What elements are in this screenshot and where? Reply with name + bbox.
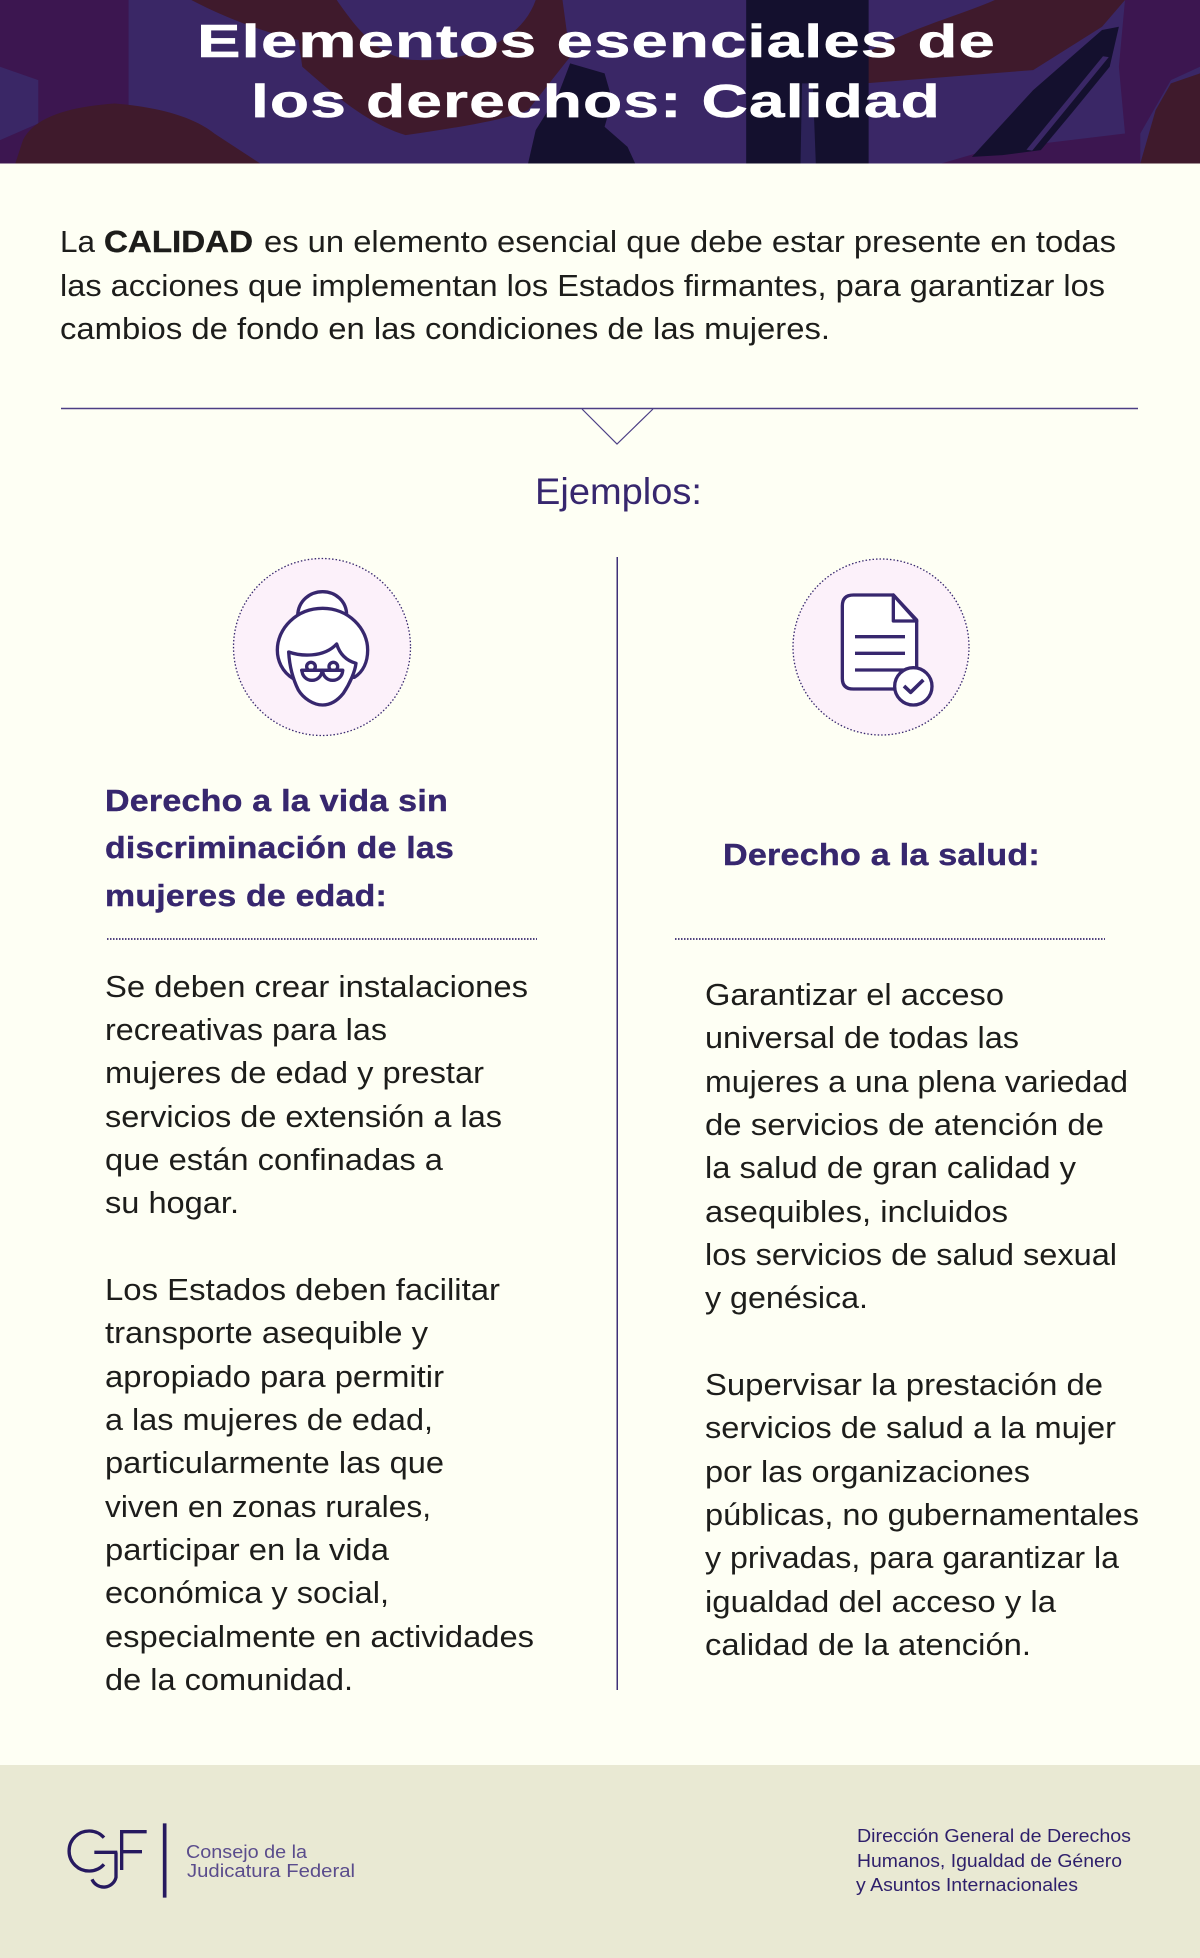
heading: ejemplos: Ejemplos: bbox=[535, 471, 702, 512]
left text: paragraph 2: a las mujeres de edad, bbox=[105, 1402, 433, 1437]
title bbox=[197, 15, 996, 127]
intro text: es un elemento esencial que debe estar presente en todas bbox=[264, 224, 1116, 259]
left text: paragraph 2: de la comunidad. bbox=[105, 1662, 353, 1697]
intro text: cambios de fondo en las condiciones de las mujeres. bbox=[60, 311, 830, 346]
left heading: mujeres de edad: bbox=[105, 878, 387, 913]
left text: paragraph 2: Los Estados deben facilitar bbox=[105, 1272, 500, 1307]
left text: paragraph 2: particularmente las que bbox=[105, 1445, 444, 1480]
right heading: Derecho a la salud: bbox=[723, 837, 1040, 872]
left heading bbox=[105, 783, 454, 913]
title: Elementos esenciales de bbox=[197, 15, 996, 67]
footer credit: Dirección General de Derechos bbox=[857, 1826, 1131, 1846]
footer credit bbox=[856, 1826, 1131, 1895]
intro text: CALIDAD bbox=[104, 224, 253, 259]
right text: paragraph 1: los servicios de salud sexual bbox=[705, 1237, 1117, 1272]
column divider bbox=[616, 557, 618, 1690]
left text: paragraph 1: Se deben crear instalaciones bbox=[105, 969, 528, 1004]
intro text: La bbox=[60, 224, 96, 259]
intro text: las acciones que implementan los Estados firmantes, para garantizar los bbox=[60, 268, 1105, 303]
right text: paragraph 1: universal de todas las bbox=[705, 1020, 1019, 1055]
right dotted divider bbox=[675, 938, 1105, 940]
left text: paragraph 2: especialmente en actividades bbox=[105, 1619, 534, 1654]
icon: document with check bbox=[793, 559, 969, 735]
right text: paragraph 2: igualdad del acceso y la bbox=[705, 1584, 1057, 1619]
left text: paragraph 1: servicios de extensión a las bbox=[105, 1099, 502, 1134]
left text: paragraph 1: recreativas para las bbox=[105, 1012, 387, 1047]
left text: paragraph 2: apropiado para permitir bbox=[105, 1359, 444, 1394]
footer credit: Humanos, Igualdad de Género bbox=[857, 1851, 1122, 1871]
intro text bbox=[60, 224, 1116, 346]
icon: older woman bbox=[234, 558, 410, 736]
left text: paragraph 1: mujeres de edad y prestar bbox=[105, 1055, 484, 1090]
divider with arrow bbox=[61, 408, 1138, 444]
right text: paragraph 1: de servicios de atención de bbox=[705, 1107, 1104, 1142]
left dotted divider bbox=[107, 938, 537, 940]
right text: paragraph 2: por las organizaciones bbox=[705, 1454, 1030, 1489]
right text: paragraph 2: calidad de la atención. bbox=[705, 1627, 1031, 1662]
left text: paragraph 1: su hogar. bbox=[105, 1185, 239, 1220]
header banner bbox=[0, 0, 1200, 164]
footer credit: y Asuntos Internacionales bbox=[856, 1875, 1078, 1895]
title: los derechos: Calidad bbox=[251, 75, 941, 127]
right text: paragraph 2: Supervisar la prestación de bbox=[705, 1367, 1103, 1402]
left text: paragraph 2 bbox=[105, 1272, 534, 1697]
left text: paragraph 2: viven en zonas rurales, bbox=[105, 1489, 431, 1524]
left heading: discriminación de las bbox=[105, 830, 454, 865]
left text: paragraph 2: económica y social, bbox=[105, 1575, 389, 1610]
left text: paragraph 2: participar en la vida bbox=[105, 1532, 390, 1567]
right text: paragraph 1 bbox=[705, 977, 1128, 1315]
left text: paragraph 2: transporte asequible y bbox=[105, 1315, 429, 1350]
right text: paragraph 1: y genésica. bbox=[705, 1280, 868, 1315]
footer band bbox=[0, 1765, 1200, 1958]
left text: paragraph 1: que están confinadas a bbox=[105, 1142, 444, 1177]
right text: paragraph 2: y privadas, para garantizar la bbox=[705, 1540, 1120, 1575]
right text: paragraph 1: Garantizar el acceso bbox=[705, 977, 1004, 1012]
right text: paragraph 1: la salud de gran calidad y bbox=[705, 1150, 1077, 1185]
logo: CJF bbox=[69, 1823, 355, 1898]
right text: paragraph 1: mujeres a una plena variedad bbox=[705, 1064, 1128, 1099]
logo: CJF: Judicatura Federal bbox=[187, 1861, 355, 1881]
left heading: Derecho a la vida sin bbox=[105, 783, 448, 818]
right text: paragraph 2: servicios de salud a la mujer bbox=[705, 1410, 1116, 1445]
right text: paragraph 1: asequibles, incluidos bbox=[705, 1194, 1008, 1229]
right text: paragraph 2: públicas, no gubernamentales bbox=[705, 1497, 1139, 1532]
right text: paragraph 2 bbox=[705, 1367, 1139, 1662]
logo: CJF: Consejo de la bbox=[186, 1842, 308, 1862]
left text: paragraph 1 bbox=[105, 969, 528, 1220]
